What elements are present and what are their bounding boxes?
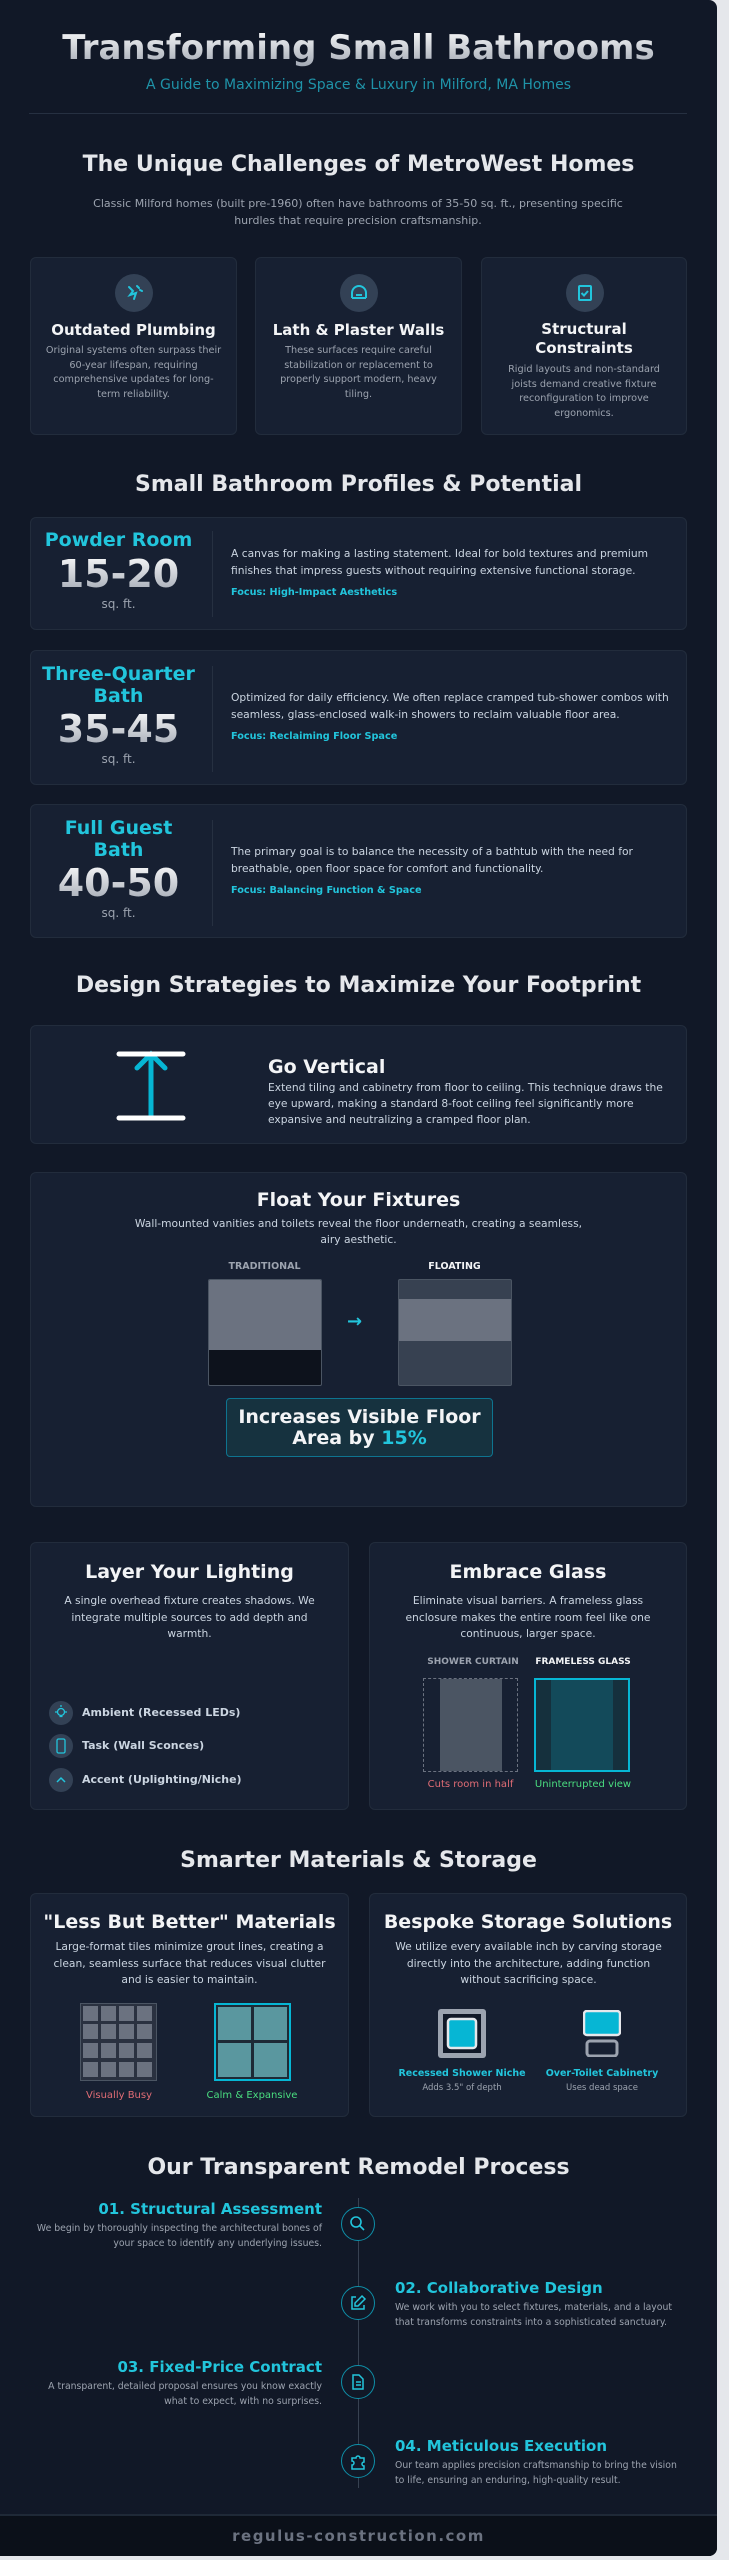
profile size <box>58 817 179 920</box>
icon: wall <box>340 274 378 312</box>
callout: 15%: Area by 15% <box>292 1427 427 1449</box>
strategy text: Go Vertical <box>268 1056 385 1078</box>
card title: Structural <box>541 320 627 338</box>
profile text: Optimized for daily efficiency. We often replace cramped tub-shower combos with seamless, glass-enclosed walk-in showers to reclaim valuable floor area. <box>231 691 669 721</box>
step 3: A transparent, detailed proposal ensures you know exactly what to expect, with no surprises. <box>48 2381 322 2406</box>
tile comparison: Calm & Expansive <box>207 2090 297 2101</box>
card title: Lath & Plaster Walls <box>273 321 444 339</box>
panel: embrace glass <box>369 1542 687 1810</box>
profile size: Full Guest <box>65 817 172 839</box>
profile size: sq. ft. <box>101 597 136 611</box>
panel: lath & plaster <box>255 257 462 435</box>
tile comparison <box>80 2003 297 2101</box>
profile text: The primary goal is to balance the necessity of a bathtub with the need for breathable, open floor space for comfort and functionality. <box>231 845 633 875</box>
lighting list: Task (Wall Sconces) <box>82 1739 204 1752</box>
glass comparison diagram <box>423 1657 631 1790</box>
glass comparison diagram: FRAMELESS GLASS <box>535 1657 631 1667</box>
heading: process: Our Transparent Remodel Process <box>147 2155 570 2180</box>
tile comparison: Visually Busy <box>86 2090 152 2101</box>
panel: less but better <box>30 1893 349 2117</box>
profile text: Focus: High-Impact Aesthetics <box>231 587 397 598</box>
timeline <box>37 2198 677 2488</box>
profile text <box>230 845 633 896</box>
comparison diagram: TRADITIONAL <box>228 1261 300 1272</box>
footer <box>0 2514 717 2556</box>
step 4: 04. Meticulous Execution <box>395 2437 607 2455</box>
comparison diagram <box>208 1261 512 1386</box>
profile text <box>231 691 669 742</box>
panel: three-quarter bath <box>30 650 687 785</box>
title: Embrace Glass <box>450 1561 606 1583</box>
storage icons: Uses dead space <box>566 2083 638 2093</box>
panel: layer lighting <box>30 1542 349 1810</box>
step 4: Our team applies precision craftsmanship to bring the vision to life, ensuring an enduring, high-quality result. <box>395 2460 677 2486</box>
profile size: sq. ft. <box>101 906 136 920</box>
icon: plumbing <box>115 274 153 312</box>
description: A single overhead fixture creates shadows. We integrate multiple sources to add depth and warmth. <box>64 1594 315 1640</box>
description: Large-format tiles minimize grout lines, creating a clean, seamless surface that reduces visual clutter and is easier to maintain. <box>54 1940 325 1986</box>
glass comparison diagram: SHOWER CURTAIN <box>427 1657 519 1667</box>
subtitle: A Guide to Maximizing Space & Luxury in Milford, MA Homes <box>146 77 571 93</box>
title: Bespoke Storage Solutions <box>384 1911 672 1933</box>
footer: regulus-construction.com <box>232 2527 485 2545</box>
title: Float Your Fixtures <box>257 1189 460 1211</box>
strategy text: Extend tiling and cabinetry from floor to ceiling. This technique draws the eye upward, making a standard 8-foot ceiling feel significantly more expansive and neutralizing a cramped floor plan. <box>268 1081 663 1126</box>
profile size: Three-Quarter <box>42 663 195 685</box>
storage icons <box>398 2009 658 2093</box>
storage icons: Recessed Shower Niche <box>398 2068 526 2079</box>
card title: Constraints <box>535 339 633 357</box>
icon: puzzle <box>341 2444 375 2478</box>
step 1: We begin by thoroughly inspecting the architectural bones of your space to identify any underlying issues. <box>37 2223 322 2248</box>
description: Wall-mounted vanities and toilets reveal the floor underneath, creating a seamless, airy aesthetic. <box>135 1217 582 1246</box>
profile size: 40-50 <box>58 861 179 905</box>
profile size: sq. ft. <box>101 752 136 766</box>
icon: edit <box>341 2286 375 2320</box>
storage icons: Adds 3.5" of depth <box>422 2083 502 2093</box>
lighting list: Ambient (Recessed LEDs) <box>82 1706 240 1719</box>
profile size: 35-45 <box>58 707 179 751</box>
panel: go vertical <box>30 1025 687 1144</box>
profile text <box>231 547 648 598</box>
heading: materials: Smarter Materials & Storage <box>180 1848 537 1873</box>
glass comparison diagram: Uninterrupted view <box>535 1779 631 1790</box>
profile size: 15-20 <box>58 552 179 596</box>
heading: challenges: The Unique Challenges of MetroWest Homes <box>83 152 634 177</box>
card title <box>535 320 633 357</box>
step 2 <box>395 2279 672 2328</box>
profile text: Focus: Reclaiming Floor Space <box>231 731 397 742</box>
profile text: Focus: Balancing Function & Space <box>231 885 422 896</box>
lighting list: Accent (Uplighting/Niche) <box>82 1773 242 1786</box>
strategy text <box>268 1056 663 1126</box>
panel: powder room <box>30 517 687 630</box>
panel: outdated plumbing <box>30 257 237 435</box>
description: Eliminate visual barriers. A frameless glass enclosure makes the entire room feel like one continuous, larger space. <box>405 1594 651 1640</box>
title: "Less But Better" Materials <box>43 1911 336 1933</box>
step 3: 03. Fixed-Price Contract <box>117 2358 322 2376</box>
card title: Outdated Plumbing <box>51 321 216 339</box>
comparison diagram: → <box>347 1311 362 1332</box>
step 2: 02. Collaborative Design <box>395 2279 603 2297</box>
step 1 <box>37 2200 322 2248</box>
profile text: A canvas for making a lasting statement. Ideal for bold textures and premium finishes that impress guests without requiring extensive functional storage. <box>231 547 648 577</box>
icon: vertical arrow <box>116 1050 186 1120</box>
profile size: Bath <box>94 685 143 707</box>
profile size <box>42 663 195 766</box>
description: We utilize every available inch by carving storage directly into the architecture, adding function without sacrificing space. <box>395 1940 662 1986</box>
title: Transforming Small Bathrooms <box>62 28 655 68</box>
icon: document <box>341 2365 375 2399</box>
title: Layer Your Lighting <box>85 1561 294 1583</box>
intro text: Classic Milford homes (built pre-1960) often have bathrooms of 35-50 sq. ft., presenting specific hurdles that require precision craftsmanship. <box>93 197 623 227</box>
profile size <box>45 529 192 611</box>
card text: Rigid layouts and non-standard joists demand creative fixture reconfiguration to improve ergonomics. <box>508 364 660 418</box>
card text: Original systems often surpass their 60-year lifespan, requiring comprehensive updates for long-term reliability. <box>46 345 221 400</box>
icon: search <box>341 2207 375 2241</box>
storage icons: Over-Toilet Cabinetry <box>546 2068 658 2079</box>
glass comparison diagram: Cuts room in half <box>428 1779 513 1790</box>
step 2: We work with you to select fixtures, materials, and a layout that transforms constraints into a sophisticated sanctuary. <box>395 2302 672 2328</box>
lighting list <box>49 1701 242 1792</box>
profile size: Powder Room <box>45 529 192 551</box>
panel: full guest bath <box>30 804 687 938</box>
callout: 15% <box>226 1398 493 1457</box>
panel: bespoke storage <box>369 1893 687 2117</box>
step 1: 01. Structural Assessment <box>98 2200 322 2218</box>
panel: float fixtures <box>30 1172 687 1507</box>
callout: 15%: Increases Visible Floor <box>238 1406 481 1428</box>
heading: design strategies: Design Strategies to Maximize Your Footprint <box>76 973 641 998</box>
icon: check box <box>566 274 604 312</box>
heading: profiles: Small Bathroom Profiles & Potential <box>135 472 582 497</box>
step 4 <box>395 2437 677 2486</box>
comparison diagram: FLOATING <box>428 1261 481 1272</box>
panel: structural <box>481 257 687 435</box>
card text: These surfaces require careful stabilization or replacement to properly support modern, heavy tiling. <box>280 345 437 400</box>
profile size: Bath <box>94 839 143 861</box>
step 3 <box>48 2358 322 2406</box>
